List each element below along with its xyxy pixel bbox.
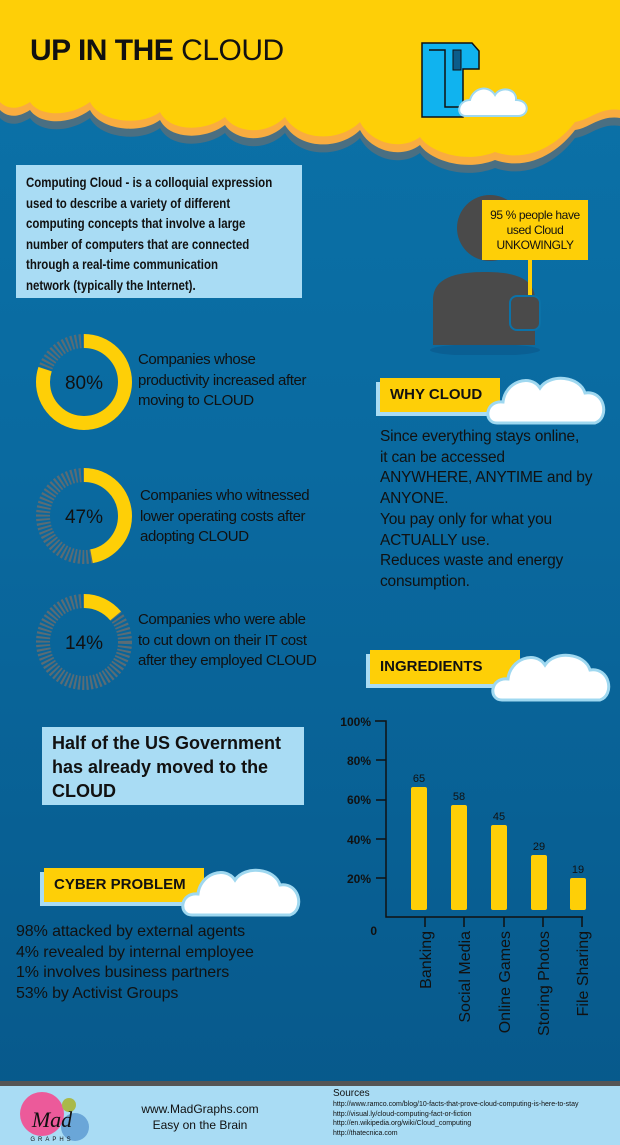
definition text block: number of computers that are connected	[26, 236, 249, 252]
bar chart: Storing Photos	[536, 931, 553, 1036]
bar chart: 20%	[347, 872, 371, 886]
donut: 14%: after they employed CLOUD	[138, 652, 316, 669]
text: why cloud: Since everything stays online,	[380, 428, 579, 445]
bar chart	[340, 715, 592, 1036]
donut: 80%: productivity increased after	[138, 372, 306, 388]
bar chart: 65	[413, 773, 425, 785]
icon: cloud ingredients	[491, 654, 610, 702]
label: ingredients: INGREDIENTS	[380, 658, 483, 675]
footer: site: www.MadGraphs.com	[141, 1102, 259, 1116]
donut: 14%: Companies who were able	[138, 611, 306, 628]
text: why cloud	[380, 428, 592, 590]
header cloud band	[0, 0, 620, 173]
footer: sources: Sources	[333, 1088, 370, 1099]
donut: 47%: lower operating costs after	[140, 508, 305, 524]
bar chart: 19	[572, 864, 584, 876]
donut: 14%: 14%	[65, 633, 103, 654]
footer: site	[141, 1102, 259, 1132]
donut: 14%	[36, 594, 316, 690]
footer: sources: http://thatecnica.com	[333, 1130, 398, 1136]
bar chart: 58	[453, 791, 465, 803]
icon: cloud cyber	[181, 868, 300, 916]
donut: 80%: Companies whose	[138, 351, 255, 368]
footer: sources	[333, 1088, 578, 1136]
text: cyber stats	[16, 923, 254, 1002]
donut: 80%	[36, 334, 306, 430]
definition text block	[16, 165, 302, 298]
text: why cloud: ANYONE.	[380, 490, 448, 507]
footer	[0, 1081, 620, 1145]
definition text block: computing concepts that involve a large	[26, 215, 245, 231]
donut: 47%	[36, 468, 309, 564]
donut: 80%: 80%	[65, 373, 103, 394]
bar chart: 29	[533, 841, 545, 853]
donut: 47%: Companies who witnessed	[140, 487, 309, 504]
text: why cloud: consumption.	[380, 573, 470, 590]
label: why cloud	[380, 378, 500, 412]
text: cyber stats: 4% revealed by internal employee	[16, 944, 254, 960]
bar chart: 100%	[340, 715, 371, 729]
bar chart: 40%	[347, 833, 371, 847]
text: why cloud: You pay only for what you	[380, 511, 552, 528]
definition text block: through a real-time communication	[26, 256, 218, 272]
callout: 95%: 95 % people have used Cloud UNKOWINGLY	[490, 208, 580, 252]
icon: floppy with cloud	[421, 42, 528, 118]
text: why cloud: ANYWHERE, ANYTIME and by	[380, 469, 592, 486]
text: why cloud: it can be accessed	[380, 449, 505, 466]
footer: site: Easy on the Brain	[153, 1118, 247, 1132]
text: why cloud: ACTUALLY use.	[380, 532, 490, 549]
logo: MadGraphs: GRAPHS	[30, 1137, 74, 1143]
footer: sources: http://visual.ly/cloud-computing-fact-or-fiction	[333, 1110, 472, 1118]
definition text block: used to describe a variety of different	[26, 195, 230, 211]
donut: 14%: to cut down on their IT cost	[138, 632, 307, 648]
bar chart: Social Media	[457, 931, 474, 1023]
donut: 47%: 47%	[65, 507, 103, 528]
bar chart: File Sharing	[575, 931, 592, 1016]
definition text block: Computing Cloud - is a colloquial expression	[26, 174, 272, 190]
text: cyber stats: 53% by Activist Groups	[16, 984, 178, 1002]
callout: US government: Half of the US Government has already moved to the CLOUD	[52, 733, 281, 801]
title: UP IN THE CLOUD	[30, 34, 284, 67]
bar chart: 45	[493, 811, 505, 823]
bar chart: 60%	[347, 793, 371, 807]
label: cyber problem	[44, 868, 204, 902]
bar chart: 0	[370, 924, 377, 938]
bar chart: Online Games	[497, 931, 514, 1033]
label: ingredients	[370, 650, 520, 684]
donut: 80%: moving to CLOUD	[138, 392, 254, 409]
bar chart: Banking	[418, 931, 435, 989]
logo: MadGraphs	[20, 1092, 89, 1143]
icon: cloud why	[486, 376, 606, 424]
text: cyber stats: 1% involves business partners	[16, 964, 229, 981]
donut: 47%: adopting CLOUD	[140, 528, 249, 545]
footer: sources: http://en.wikipedia.org/wiki/Cloud_computing	[333, 1120, 471, 1127]
text: why cloud: Reduces waste and energy	[380, 552, 563, 569]
definition text block: network (typically the Internet).	[26, 277, 196, 293]
label: why cloud: WHY CLOUD	[390, 386, 482, 403]
logo: MadGraphs: Mad	[31, 1107, 73, 1132]
footer: sources: http://www.ramco.com/blog/10-facts-that-prove-cloud-computing-is-here-to-stay	[333, 1101, 578, 1108]
label: cyber problem: CYBER PROBLEM	[54, 876, 186, 893]
bar chart: 80%	[347, 754, 371, 768]
icon: person with sign	[430, 195, 588, 355]
text: cyber stats: 98% attacked by external agents	[16, 923, 245, 940]
